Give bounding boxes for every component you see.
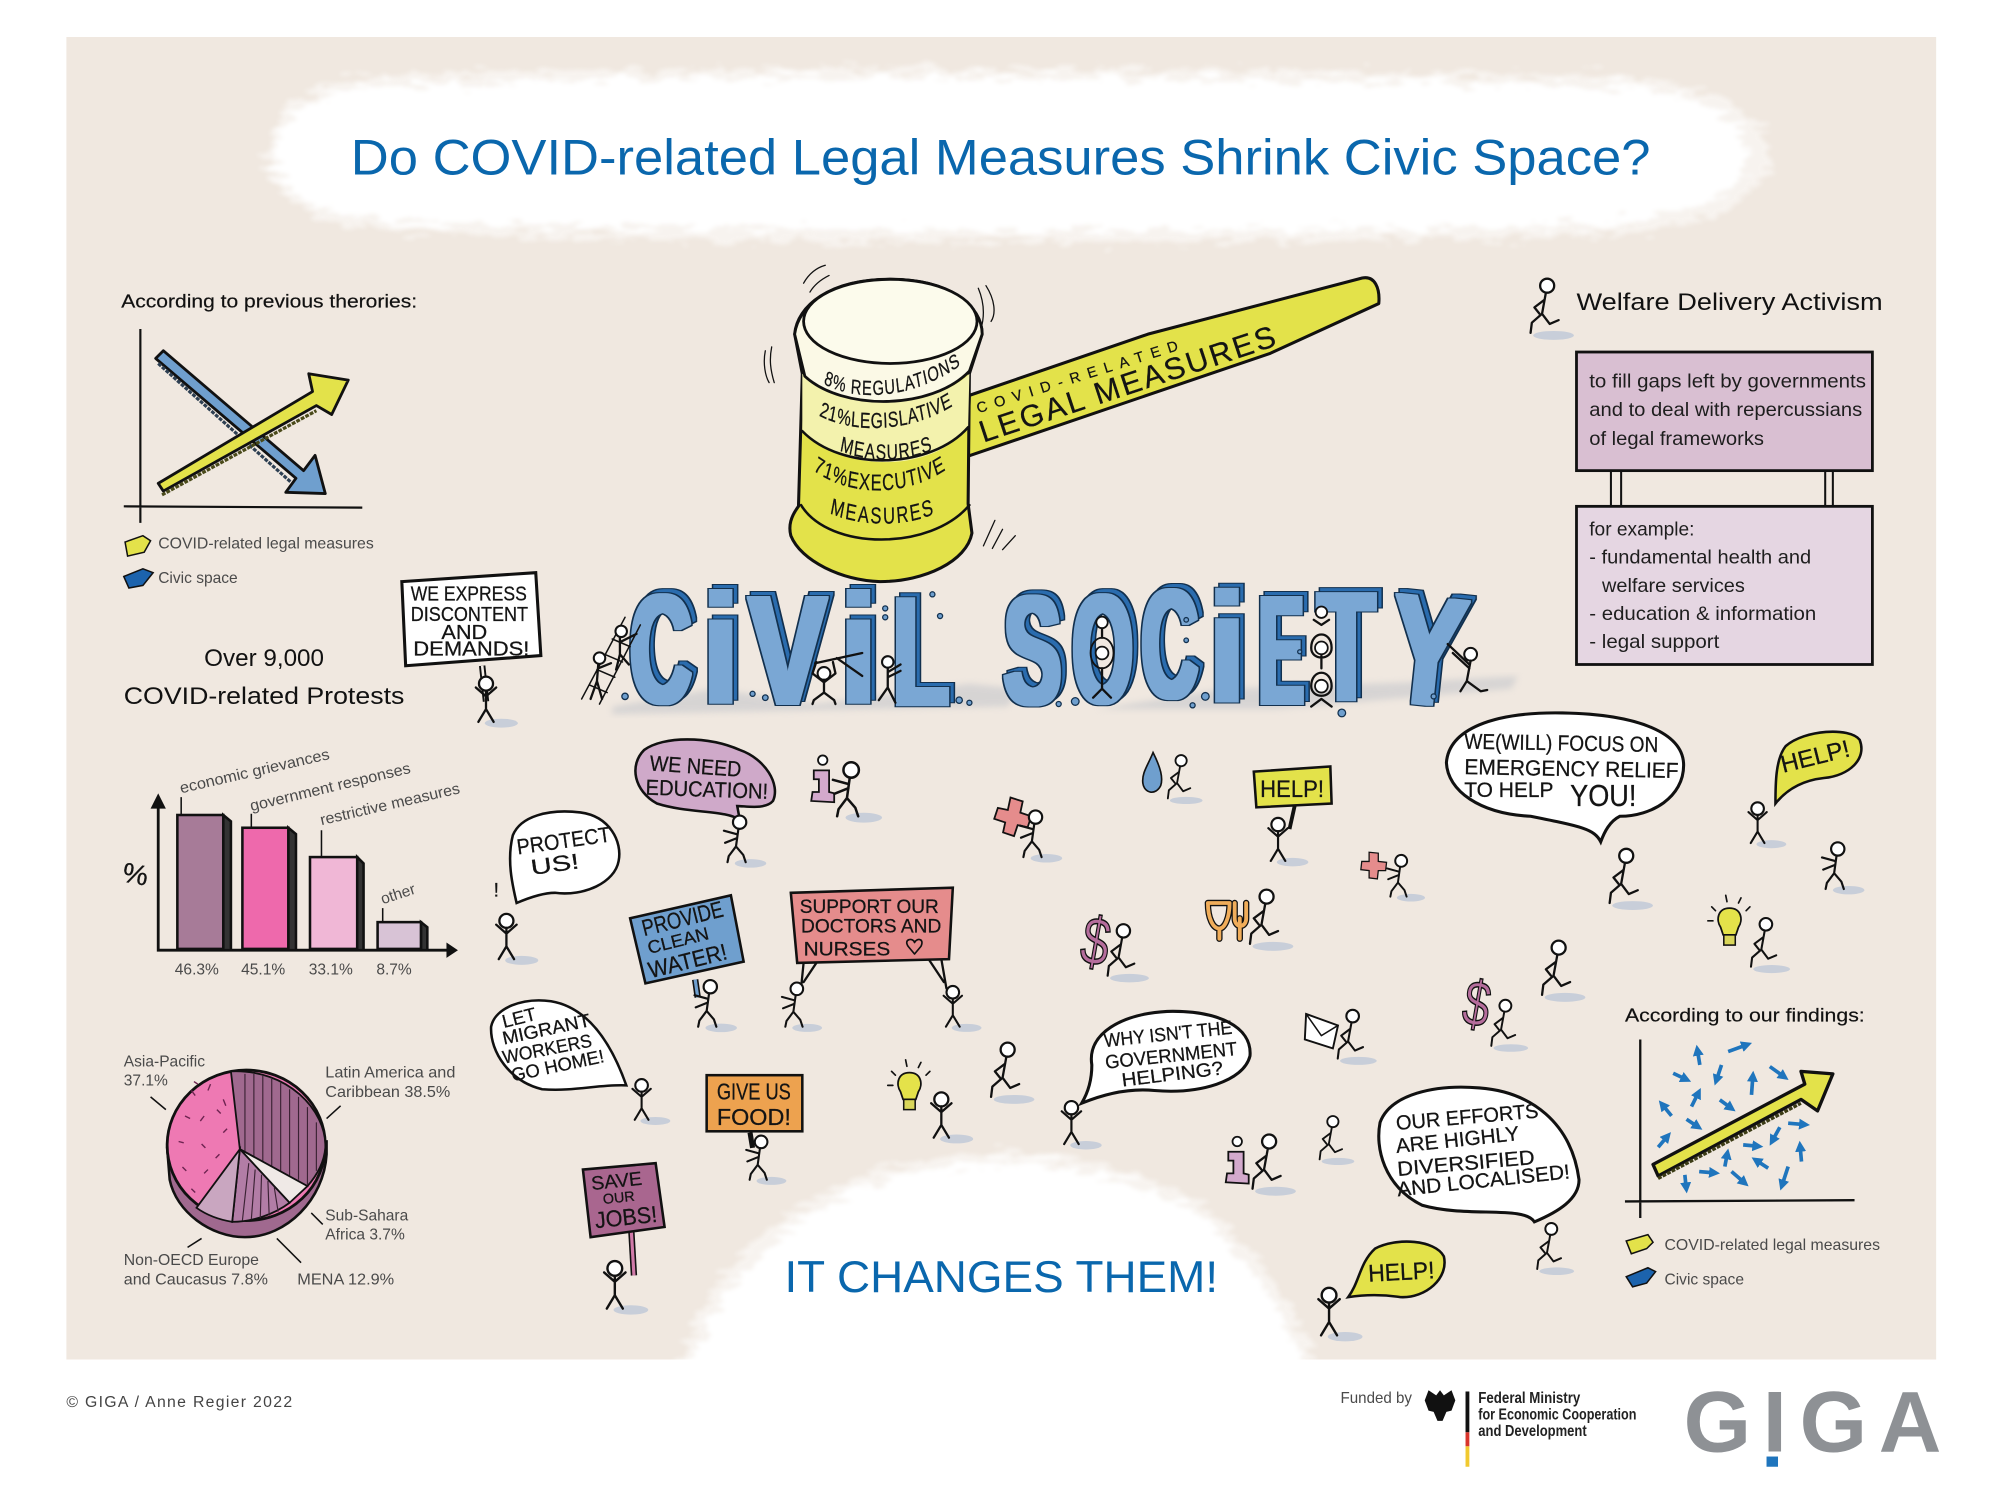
scene: let migrant workers bubble: WORKERS (501, 1030, 594, 1068)
chart axes (1625, 1039, 1855, 1218)
protests heading: Over 9,000 (204, 645, 324, 672)
scene: let migrant workers bubble (491, 1000, 670, 1125)
scene: idea bulb 1 (1708, 895, 1790, 973)
head labels: 71%EXECUTIVE (816, 456, 946, 491)
title: Do COVID-related Legal Measures Shrink Civic Space? (351, 129, 1650, 186)
pie labels: Latin America and (325, 1065, 455, 1082)
scene: help bubble top right: HELP! (1778, 736, 1853, 779)
sign posts (1611, 471, 1833, 505)
chart axes (124, 329, 362, 523)
funder block: and Development (1478, 1423, 1587, 1440)
panel: our findings (1625, 1005, 1880, 1288)
head labels: 21%LEGISLATIVE (819, 392, 952, 428)
scene: let migrant workers bubble: GO HOME! (509, 1045, 606, 1085)
bar labels: 8.7% (376, 961, 412, 978)
funder block: for Economic Cooperation (1478, 1407, 1636, 1424)
heading: previous theories: According to previous therories: (121, 290, 417, 311)
civil society lettering: i (1209, 560, 1245, 734)
scene: our efforts bubble (1379, 1087, 1579, 1275)
scene: our efforts bubble: ARE HIGHLY (1395, 1123, 1521, 1158)
slice: Non-OECD (196, 1149, 240, 1222)
scene: why isn't the government bubble: GOVERNMENT (1104, 1039, 1239, 1074)
civil society lettering: V (749, 563, 827, 737)
scene: information icon 2 (1226, 1134, 1296, 1196)
sign: examples (1576, 506, 1872, 664)
funder block (1341, 1390, 1636, 1467)
scene: support our doctors sign: DOCTORS AND (801, 915, 941, 937)
civil society lettering (630, 557, 1473, 741)
scene: give us food sign: GIVE US (717, 1078, 791, 1104)
panel: welfare delivery activism (1531, 279, 1883, 664)
acrobats between E and T (1311, 606, 1332, 707)
scene: water drop (1143, 752, 1203, 804)
protests heading: COVID-related Protests (124, 683, 404, 710)
bar labels (175, 746, 462, 978)
civil society lettering: E (1259, 563, 1304, 737)
figure: runner (991, 1043, 1034, 1104)
pie labels: Sub-Sahara (325, 1208, 409, 1225)
scene: give us food sign: FOOD! (717, 1104, 791, 1130)
scene: our efforts bubble: AND LOCALISED! (1396, 1161, 1571, 1201)
sign: examples: - legal support (1589, 632, 1720, 653)
scene: food icon (1208, 890, 1293, 951)
scene: our efforts bubble: OUR EFFORTS (1395, 1101, 1539, 1135)
panel: previous theories (121, 290, 417, 588)
scene: let migrant workers bubble: LET (500, 1003, 538, 1032)
figure: activist (1531, 279, 1574, 340)
heading: findings: According to our findings: (1625, 1005, 1865, 1026)
head labels: 8% REGULATIONS (824, 354, 960, 396)
sign: examples: for example: (1589, 520, 1694, 541)
legend (124, 535, 374, 588)
scene: help bubble top right (1748, 732, 1861, 848)
scene: provide clean water sign (630, 895, 744, 1032)
civil society lettering: O (1073, 562, 1133, 736)
scene: give us food sign (707, 1075, 802, 1185)
scene: we express discontent sign: WE EXPRESS (411, 584, 527, 606)
scene: dollar icon 1 (1075, 902, 1149, 982)
pie labels: Caribbean 38.5% (325, 1084, 450, 1101)
figure: walker (1822, 842, 1864, 894)
civil society lettering: i (841, 562, 876, 736)
scene: we will focus bubble: EMERGENCY RELIEF (1464, 754, 1679, 783)
bar labels: restrictive measures (319, 780, 462, 829)
head labels: MEASURES (840, 436, 932, 459)
handle (967, 278, 1379, 457)
pusher by L (879, 656, 901, 703)
figure: walker (1320, 1116, 1354, 1165)
sign: purpose (1576, 352, 1872, 471)
bar labels: 46.3% (175, 961, 219, 978)
scene: help sign: HELP! (1260, 776, 1324, 803)
scene: save our jobs sign: JOBS! (593, 1201, 658, 1233)
head labels: MEASURES (830, 498, 933, 524)
scene: we need education bubble (635, 739, 775, 868)
stacked in O (1091, 617, 1114, 698)
bar labels: government responses (248, 760, 412, 815)
gavel (764, 264, 1381, 584)
icon: federal eagle (1425, 1390, 1455, 1421)
civil society lettering: C (630, 562, 691, 736)
scene: idea bulb 2 (888, 1060, 973, 1143)
pie labels: MENA 12.9% (297, 1271, 394, 1288)
bar chart: % (120, 857, 151, 892)
civil society shadows (612, 676, 1518, 714)
scene: we will focus bubble (1446, 713, 1684, 910)
sign: examples: - fundamental health and (1589, 548, 1811, 569)
legend: COVID-related legal measures (158, 535, 374, 552)
legend: Civic space (1664, 1271, 1744, 1288)
title cloud (266, 68, 1771, 242)
sign: examples: - education & information (1589, 604, 1816, 625)
scene: help bubble bottom (1318, 1242, 1445, 1341)
civil society lettering: i (703, 562, 739, 736)
arrow: legal measures rising (158, 374, 348, 495)
scene: we express discontent sign: DISCONTENT (411, 604, 528, 626)
heading: welfare: Welfare Delivery Activism (1576, 289, 1883, 316)
civil society lettering: T (1318, 559, 1375, 733)
pie labels: Africa 3.7% (325, 1227, 405, 1244)
GIGA logo: GIGA (1684, 1373, 1941, 1470)
civil society lettering: S (1004, 563, 1061, 737)
scene: support our doctors sign: SUPPORT OUR (800, 896, 939, 918)
slice: Sub-Sahara (240, 1149, 307, 1203)
gavel: LEGAL MEASURES (975, 320, 1280, 449)
footer copyright: © GIGA / Anne Regier 2022 (66, 1394, 292, 1411)
bar labels: economic grievances (178, 746, 331, 797)
bar labels: 45.1% (241, 961, 285, 978)
arrow: legal measures rising (1653, 1071, 1833, 1178)
legend: COVID-related legal measures (1664, 1237, 1880, 1254)
sign: purpose: of legal frameworks (1589, 429, 1764, 450)
figure: runner (1542, 941, 1585, 1002)
scene: envelope (1305, 1010, 1377, 1065)
scene: support our doctors sign (782, 888, 982, 1032)
pie labels: Asia-Pacific (124, 1053, 205, 1070)
scene: we express discontent sign: DEMANDS! (413, 639, 529, 661)
scene: we express discontent sign (402, 573, 541, 728)
bar labels: 33.1% (309, 961, 353, 978)
scene: protect us bubble: ! (494, 881, 499, 902)
bar labels: other (379, 881, 418, 908)
pie labels: and Caucasus 7.8% (124, 1271, 268, 1288)
protests heading (124, 645, 404, 710)
pusher at Y (1448, 644, 1487, 691)
pie labels: 37.1% (124, 1072, 168, 1089)
scene: health cross 2 (1361, 852, 1425, 902)
scene: provide clean water sign: CLEAN (645, 923, 711, 958)
sign: purpose: and to deal with repercussians (1589, 400, 1862, 421)
scene: support our doctors sign: NURSES (804, 938, 890, 960)
scene: dollar icon 2 (1458, 966, 1528, 1052)
flag bar (1466, 1391, 1469, 1467)
scene: provide clean water sign: PROVIDE (639, 896, 726, 941)
bars (177, 815, 427, 950)
scene: protect us bubble (494, 811, 619, 965)
scene: we will focus bubble: WE(WILL) FOCUS ON (1464, 729, 1658, 757)
scene: provide clean water sign: WATER! (645, 938, 730, 983)
sign: purpose: to fill gaps left by governments (1589, 372, 1866, 393)
motion lines (764, 265, 1015, 550)
debris (622, 592, 1436, 717)
civil society lettering: C (1142, 557, 1198, 731)
scene: protect us bubble: US! (529, 848, 581, 880)
figures and cracks on letters (582, 592, 1487, 717)
scene: save our jobs sign (583, 1163, 665, 1315)
scene: we express discontent sign: AND (441, 622, 487, 644)
scene: why isn't the government bubble (1062, 1011, 1250, 1150)
arrow: civic space falling (156, 351, 325, 494)
scene: protect us bubble: PROTECT (515, 822, 612, 859)
bar chart (120, 746, 462, 978)
legend (1626, 1235, 1880, 1288)
scene: help bubble bottom: HELP! (1367, 1257, 1435, 1288)
pie chart (124, 1053, 455, 1288)
funder block: Funded by (1341, 1390, 1412, 1407)
scene: health cross 1 (992, 795, 1062, 863)
scene: help sign (1254, 767, 1332, 866)
scene: let migrant workers bubble: MIGRANT (500, 1009, 592, 1048)
pie labels (124, 1053, 455, 1288)
civil society lettering: L (893, 564, 949, 738)
lifter under V (813, 653, 862, 704)
scatter of civic space arrows (1658, 1045, 1804, 1188)
bottom cloud (0, 1153, 2000, 1505)
sign: examples: welfare services (1601, 576, 1745, 597)
pie labels: Non-OECD Europe (124, 1252, 259, 1269)
pink slice pattern (179, 1082, 227, 1193)
scene: why isn't the government bubble: WHY ISN'T THE (1103, 1018, 1233, 1052)
scene: save our jobs sign: SAVE (590, 1169, 643, 1195)
funder block: Federal Ministry (1478, 1390, 1581, 1407)
scene: our efforts bubble: DIVERSIFIED (1396, 1147, 1536, 1181)
scene: we need education bubble: WE NEED (649, 750, 742, 782)
conclusion text: IT CHANGES THEM! (784, 1253, 1218, 1302)
scene: we will focus bubble: YOU! (1570, 779, 1636, 813)
scene: information icon 1 (811, 755, 882, 823)
head labels (816, 354, 960, 524)
handle label: COVID-RELATED (975, 339, 1180, 417)
legend: Civic space (158, 570, 238, 587)
slice: Latin America (231, 1071, 325, 1186)
scene: we need education bubble: EDUCATION! (645, 775, 768, 804)
ladder (582, 617, 640, 704)
climbers (591, 652, 611, 699)
civil society lettering: Y (1382, 560, 1473, 741)
scene: why isn't the government bubble: HELPING? (1120, 1058, 1224, 1092)
slice: MENA (232, 1149, 290, 1222)
scene: we will focus bubble: TO HELP (1464, 777, 1554, 802)
scene: save our jobs sign: OUR (602, 1188, 635, 1207)
gavel head (790, 279, 982, 582)
